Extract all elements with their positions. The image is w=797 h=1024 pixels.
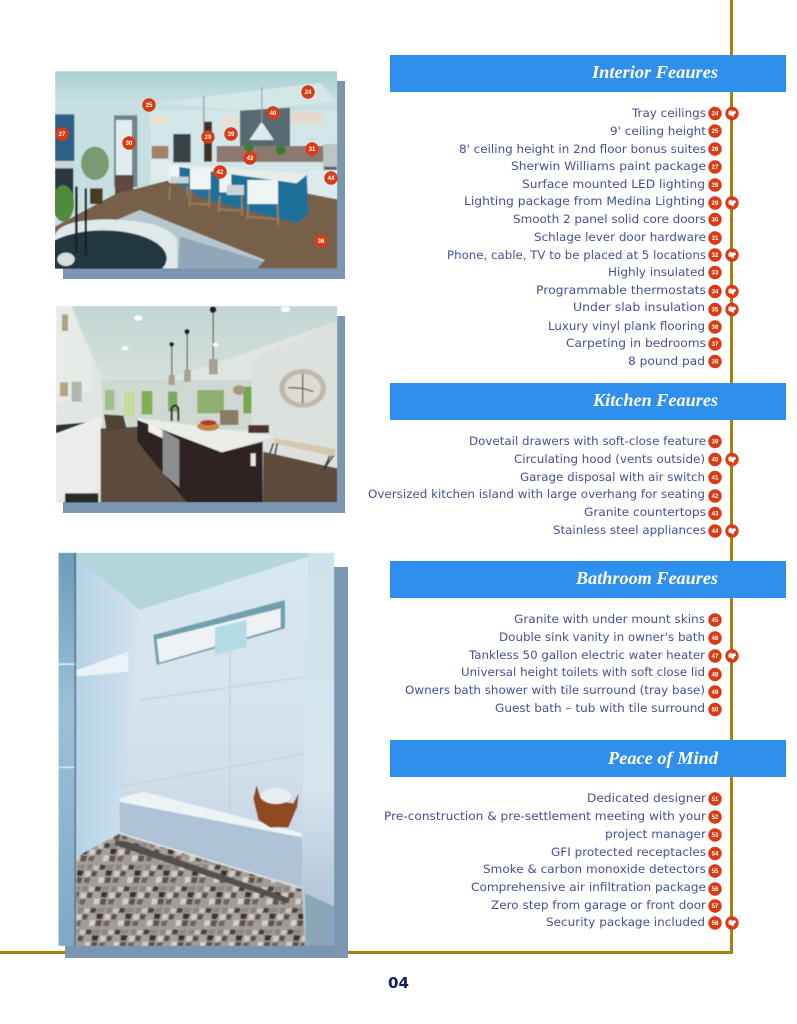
feature 51: 51: [712, 797, 719, 803]
photo markers: 43: [247, 156, 254, 162]
feature 32: Phone, cable, TV to be placed at 5 locations: [447, 248, 706, 262]
feature 51: Dedicated designer: [587, 791, 706, 805]
list: kitchen features: [368, 434, 739, 538]
photo markers: 30: [126, 141, 133, 147]
photo markers: 39: [228, 132, 235, 138]
feature 33: 33: [712, 271, 719, 277]
feature 47: 47: [712, 654, 719, 660]
header: Kitchen Feaures: Kitchen Feaures: [592, 390, 718, 410]
header: Kitchen Feaures: [390, 383, 786, 420]
feature 57: Zero step from garage or front door: [491, 898, 706, 912]
photo markers: 24: [305, 90, 312, 96]
photo: open kitchen with numbered markers: [40, 71, 345, 286]
feature 43: 43: [712, 512, 719, 518]
feature 34: Programmable thermostats: [536, 283, 706, 297]
feature 53: 53: [712, 833, 719, 839]
header: Bathroom Feaures: Bathroom Feaures: [575, 568, 718, 588]
feature 41: Garage disposal with air switch: [520, 470, 705, 484]
list: bathroom features: [405, 612, 739, 716]
photo markers: 42: [217, 170, 224, 176]
feature 44: Stainless steel appliances: [553, 523, 706, 537]
feature 31: 31: [712, 236, 719, 242]
page number: 04: [388, 974, 409, 992]
header: Peace of Mind: Peace of Mind: [607, 748, 719, 768]
feature 41: 41: [712, 476, 719, 482]
feature 30: Smooth 2 panel solid core doors: [513, 212, 706, 226]
feature 27: 27: [712, 165, 719, 171]
feature 54: 54: [712, 852, 719, 858]
feature 29: Lighting package from Medina Lighting: [464, 194, 705, 208]
feature 34: 34: [712, 290, 719, 296]
feature 26: 8' ceiling height in 2nd floor bonus suites: [459, 142, 706, 156]
feature 37: 37: [712, 342, 719, 348]
feature 25: 25: [712, 129, 719, 135]
header: Interior Feaures: Interior Feaures: [591, 62, 718, 82]
feature 35: [573, 300, 739, 316]
photo markers: 40: [270, 111, 277, 117]
photo markers: 27: [59, 132, 66, 138]
photo markers: 25: [146, 103, 153, 109]
feature 43: Granite countertops: [584, 505, 706, 519]
feature 50: 50: [712, 708, 719, 714]
feature 53: project manager: [605, 827, 706, 841]
feature 58: 58: [712, 921, 719, 927]
feature 33: Highly insulated: [608, 265, 705, 279]
header: Bathroom Feaures: [390, 561, 786, 598]
feature 45: 45: [712, 618, 719, 624]
feature 49: Owners bath shower with tile surround (tray base): [405, 683, 705, 697]
feature 48: 48: [712, 673, 719, 679]
feature 35: 35: [712, 308, 719, 314]
feature 54: GFI protected receptacles: [551, 845, 706, 859]
feature 31: Schlage lever door hardware: [534, 230, 706, 244]
feature 28: 28: [712, 183, 719, 189]
feature 56: Comprehensive air infiltration package: [471, 880, 706, 894]
feature 36: 36: [712, 325, 719, 331]
feature 29: 29: [712, 201, 719, 207]
feature 52: 52: [712, 815, 719, 821]
feature 25: 9' ceiling height: [610, 124, 706, 138]
feature 27: Sherwin Williams paint package: [511, 159, 706, 173]
feature 46: 46: [712, 636, 719, 642]
chairs drawn as backrests, seats and legs: [169, 166, 278, 225]
feature 49: 49: [712, 690, 719, 696]
feature 48: Universal height toilets with soft close lid: [461, 665, 705, 679]
feature 55: 55: [712, 869, 719, 875]
feature 40: 40: [712, 458, 719, 464]
feature 38: 38: [712, 360, 719, 366]
feature 39: Dovetail drawers with soft-close feature: [469, 434, 706, 448]
photo: walk-in shower with mosaic floor: [58, 553, 348, 958]
photo markers: [55, 85, 338, 248]
feature 24: 24: [712, 112, 719, 118]
feature 57: 57: [712, 904, 719, 910]
feature 44: 44: [712, 529, 719, 535]
feature 35: Under slab insulation: [573, 300, 705, 314]
photo: kitchen island with pendant lights: [56, 306, 345, 513]
feature 55: Smoke & carbon monoxide detectors: [483, 862, 706, 876]
feature 36: Luxury vinyl plank flooring: [548, 319, 705, 333]
feature 37: Carpeting in bedrooms: [566, 336, 706, 350]
feature 24: [631, 106, 739, 120]
list: peace of mind features: [384, 791, 739, 930]
feature 56: 56: [712, 887, 719, 893]
feature 40: Circulating hood (vents outside): [514, 452, 705, 466]
photo markers: 36: [318, 239, 325, 245]
feature 52: Pre-construction & pre-settlement meeting with your: [384, 809, 706, 823]
feature 46: Double sink vanity in owner's bath: [499, 630, 705, 644]
feature 28: Surface mounted LED lighting: [522, 177, 705, 191]
photo markers: 29: [205, 135, 212, 141]
feature 39: 39: [712, 440, 719, 446]
photo markers: 44: [328, 176, 335, 182]
feature 24: Tray ceilings: [631, 106, 706, 120]
feature 42: Oversized kitchen island with large overhang for seating: [368, 487, 705, 501]
feature 32: 32: [712, 253, 719, 259]
feature 45: Granite with under mount skins: [514, 612, 705, 626]
feature 47: Tankless 50 gallon electric water heater: [468, 648, 705, 662]
header: Interior Feaures: [390, 55, 786, 92]
header: Peace of Mind: [390, 740, 786, 777]
feature 42: 42: [712, 494, 719, 500]
feature 58: Security package included: [546, 915, 705, 929]
list: interior features: [447, 106, 739, 368]
feature 26: 26: [712, 147, 719, 153]
feature 30: 30: [712, 218, 719, 224]
photo markers: 31: [309, 147, 316, 153]
feature 50: Guest bath – tub with tile surround: [495, 701, 705, 715]
feature 38: 8 pound pad: [628, 354, 705, 368]
